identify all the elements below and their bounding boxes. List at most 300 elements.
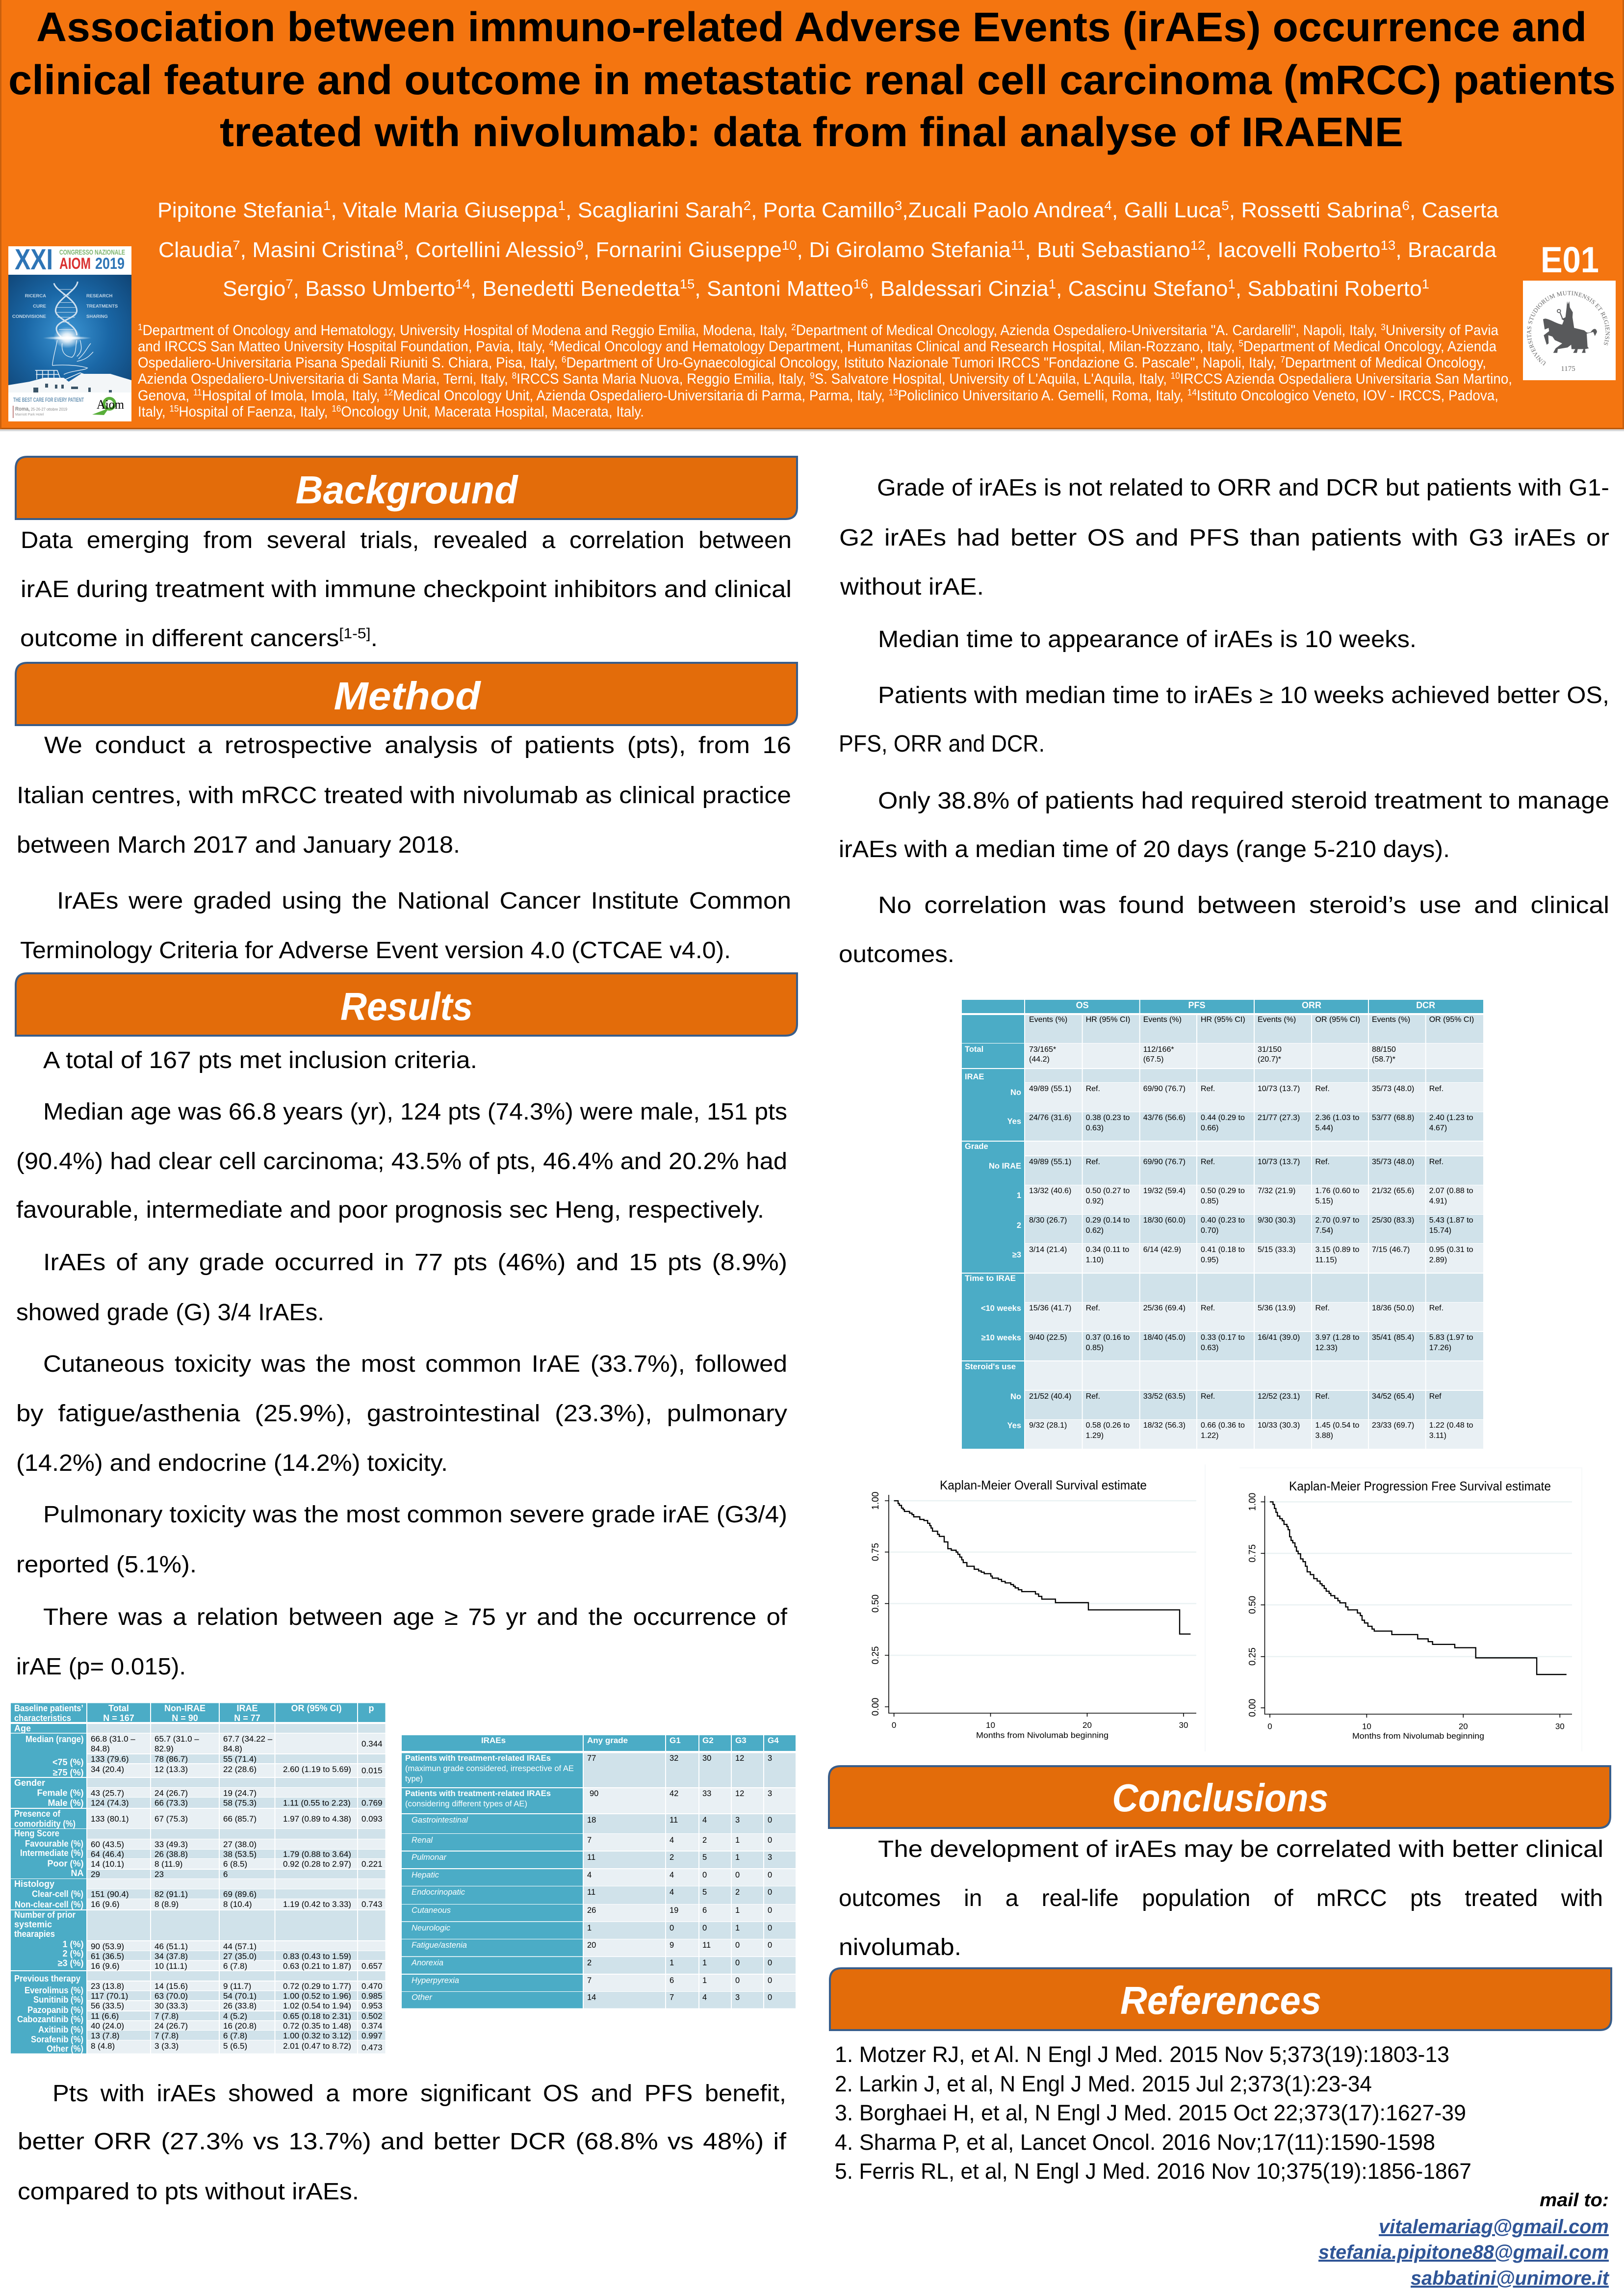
table body values: 0.344 [361, 1739, 383, 1748]
table values: 0.95) [1201, 1256, 1218, 1264]
table values: 15/36 (41.7) [1029, 1304, 1071, 1312]
table values: 7 [670, 1993, 674, 2002]
table body values: 24 (26.7) [155, 1789, 188, 1798]
table values: 1.45 (0.54 to [1315, 1421, 1359, 1430]
table body values: 0.985 [361, 1991, 383, 2001]
text: results continued, right column [839, 475, 1609, 967]
row labels: Presence of [14, 1809, 61, 1819]
row labels: ≥10 weeks [981, 1333, 1021, 1342]
table body values: 0.83 (0.43 to 1.59) [283, 1952, 351, 1961]
table values: 1.10) [1086, 1256, 1104, 1264]
row labels: Anorexia [411, 1958, 443, 1967]
table values: 69/90 (76.7) [1143, 1158, 1186, 1166]
table values: 3 [768, 1754, 772, 1763]
table values: 11.15) [1315, 1256, 1337, 1264]
row labels: IRAE [965, 1072, 984, 1081]
row labels: Cutaneous [412, 1905, 451, 1915]
logo: AIOM 2019 congress poster: TREATMENTS [86, 304, 118, 309]
row labels: Yes [1007, 1117, 1021, 1126]
table values: Ref. [1086, 1392, 1100, 1401]
table values: 35/41 (85.4) [1372, 1333, 1414, 1342]
table values: 12 [735, 1754, 744, 1763]
row labels: 1 (%) [62, 1939, 83, 1949]
table values: 10/33 (30.3) [1258, 1421, 1300, 1430]
table body values: 66 (85.7) [223, 1814, 257, 1824]
table values: 4 [670, 1871, 674, 1879]
row labels: Male (%) [48, 1798, 84, 1808]
table values: Events (%) [1029, 1016, 1067, 1024]
logo: University of Modena and Reggio Emilia seal: 1175 [1561, 365, 1575, 373]
row labels: No [1010, 1088, 1021, 1097]
table body values: 1.97 (0.89 to 4.38) [283, 1814, 351, 1824]
table body values: 1.79 (0.88 to 3.64) [283, 1850, 351, 1859]
logo: AIOM 2019 congress poster: AIOM [59, 255, 91, 272]
table values: OR (95% CI) [1429, 1016, 1474, 1024]
table body values: 0.997 [361, 2031, 383, 2040]
row labels: <10 weeks [981, 1304, 1021, 1313]
table body values: 8 (4.8) [91, 2041, 115, 2051]
table values: 18/40 (45.0) [1143, 1333, 1186, 1342]
chart: Kaplan-Meier progression free survival: 0.25 [1248, 1647, 1258, 1666]
table body values: 54 (70.1) [223, 1991, 257, 2001]
row labels [14, 1723, 84, 2054]
header row: G2 [702, 1736, 714, 1745]
text: method paragraphs: between March 2017 and January 2018. [17, 832, 460, 858]
authors: Claudia7, Masini Cristina8, Cortellini Alessio9, Fornarini Giuseppe10, Di Girolamo Stefania11, Buti Sebastiano12, Iacovelli Roberto13, Bracarda [158, 237, 1497, 262]
heading: Conclusions: Conclusions [1112, 1776, 1328, 1820]
text: results continued, right column: without irAE. [840, 574, 984, 600]
header row: Any grade [587, 1736, 628, 1745]
text: results paragraphs [16, 1047, 788, 1680]
table values: 1 [735, 1853, 740, 1862]
row labels: ≥75 (%) [53, 1768, 83, 1777]
row labels: Renal [412, 1835, 433, 1845]
table body values: 84.8) [91, 1744, 110, 1753]
panel: method [16, 663, 797, 964]
table values: 3.97 (1.28 to [1315, 1333, 1359, 1342]
table values: 1 [735, 1924, 740, 1932]
row labels: Patients with treatment-related IRAEs [405, 1789, 551, 1798]
table body values: 0.769 [361, 1799, 383, 1807]
table values: 9/40 (22.5) [1029, 1333, 1067, 1342]
table body values: 7 (7.8) [155, 2031, 179, 2040]
table body values: 0.470 [361, 1982, 383, 1991]
table body values: 69 (89.6) [223, 1890, 257, 1899]
table values: 0.92) [1086, 1197, 1104, 1205]
column group headers: OS [1076, 1000, 1089, 1010]
row labels: 2 (%) [62, 1949, 83, 1958]
text: results continued, right column: Only 38.8% of patients had required steroid treatment to manage [878, 788, 1609, 814]
table values: 5.43 (1.87 to [1429, 1216, 1473, 1225]
table values: 3 [735, 1816, 740, 1825]
table values: Ref. [1086, 1304, 1100, 1312]
table values: 1 [735, 1836, 740, 1845]
logo: AIOM 2019 congress poster: Aiom [97, 397, 124, 412]
table values: Events (%) [1372, 1016, 1410, 1024]
table values: (58.7)* [1372, 1055, 1395, 1064]
affiliations: Genova, 11Hospital of Imola, Imola, Italy, 12Medical Oncology Unit, Azienda Ospedaliero-Universitaria di Parma, Parma, Italy, 13Policlinico Universitario A. Gemelli, Roma, Italy, 14Istituto Oncologico Veneto, IOV - IRCCS, Padova, [138, 387, 1498, 404]
table values: 33/52 (63.5) [1143, 1392, 1186, 1401]
table body values: 61 (36.5) [91, 1952, 124, 1961]
table values: 0.50 (0.29 to [1201, 1187, 1245, 1195]
table values: 42 [670, 1789, 678, 1798]
text: results continued, right column: irAEs with a median time of 20 days (range 5-210 days). [839, 836, 1450, 862]
row labels: Other [412, 1993, 433, 2002]
table values: 0 [768, 1871, 772, 1879]
table values: 16/41 (39.0) [1258, 1333, 1300, 1342]
table values: 24/76 (31.6) [1029, 1114, 1071, 1122]
table header row: OR (95% CI) [291, 1703, 342, 1713]
table body values: 90 (53.9) [91, 1942, 124, 1951]
table values: 2.89) [1429, 1256, 1447, 1264]
table values: 2.36 (1.03 to [1315, 1114, 1359, 1122]
table body values [91, 1734, 383, 2052]
table body values: 0.72 (0.29 to 1.77) [283, 1982, 351, 1991]
list: references: 4. Sharma P, et al, Lancet Oncol. 2016 Nov;17(11):1590-1598 [835, 2130, 1435, 2155]
table values: OR (95% CI) [1315, 1016, 1360, 1024]
affiliations: Italy, 15Hospital of Faenza, Italy, 16Oncology Unit, Macerata Hospital, Macerata, Italy. [138, 403, 644, 420]
row labels: comorbidity (%) [14, 1819, 76, 1829]
table values: 0 [768, 1993, 772, 2002]
table body values: 5 (6.5) [223, 2041, 247, 2051]
text: conclusions paragraph: outcomes in a real-life population of mRCC pts treated with [839, 1885, 1603, 1911]
table body values: 6 (7.8) [223, 1961, 247, 1971]
table values: 1.22 (0.48 to [1429, 1421, 1473, 1430]
table values: 5.83 (1.97 to [1429, 1333, 1473, 1342]
text: results paragraphs: reported (5.1%). [16, 1552, 197, 1578]
table body values: 1.00 (0.52 to 1.96) [283, 1991, 351, 2001]
table values: 0.85) [1201, 1197, 1218, 1205]
table values: 49/89 (55.1) [1029, 1085, 1071, 1093]
table values: 13/32 (40.6) [1029, 1187, 1071, 1195]
table values: 3 [768, 1853, 772, 1862]
chart: Kaplan-Meier overall survival: 0.75 [871, 1543, 881, 1561]
row labels: Patients with treatment-related IRAEs [405, 1753, 551, 1763]
table values: 1 [702, 1958, 707, 1967]
table header row [14, 1703, 374, 1723]
table values: 0 [768, 1941, 772, 1950]
table values: 49/89 (55.1) [1029, 1158, 1071, 1166]
table body values: 6 [223, 1870, 228, 1879]
logo: AIOM 2019 congress poster: SHARING [86, 314, 108, 319]
table values: 23/33 (69.7) [1372, 1421, 1414, 1430]
table body values: 6 (8.5) [223, 1859, 247, 1869]
table values: 0.85) [1086, 1344, 1104, 1352]
table values: 4.91) [1429, 1197, 1447, 1205]
table body values: 40 (24.0) [91, 2021, 124, 2031]
table body values: 22 (28.6) [223, 1765, 257, 1774]
row labels: Pulmonar [412, 1852, 447, 1862]
table body values: 3 (3.3) [155, 2041, 179, 2051]
survival curve [1270, 1502, 1567, 1674]
row labels: No [1010, 1392, 1021, 1401]
row labels: (maximun grade considered, irrespective of AE [405, 1764, 574, 1773]
table body values: 66.8 (31.0 – [91, 1734, 135, 1744]
table values: 2 [735, 1888, 740, 1897]
table values: 33 [702, 1789, 711, 1798]
table: baseline patients' characteristics [11, 1703, 386, 2054]
header row: G3 [735, 1736, 747, 1745]
table values: 9 [670, 1941, 674, 1950]
column group headers [1076, 1000, 1435, 1010]
table values: 5.15) [1315, 1197, 1333, 1205]
row labels: 1 [1017, 1191, 1021, 1200]
table values: 0.29 (0.14 to [1086, 1216, 1130, 1225]
table values: Ref. [1201, 1304, 1215, 1312]
table body values: 151 (90.4) [91, 1890, 129, 1899]
table values: 0.41 (0.18 to [1201, 1246, 1245, 1254]
table values: HR (95% CI) [1201, 1016, 1245, 1024]
table values: 0.50 (0.27 to [1086, 1187, 1130, 1195]
list: references [835, 2042, 1471, 2184]
row labels: Hepatic [412, 1870, 439, 1879]
table values: 73/165* [1029, 1045, 1056, 1054]
heading: Background [16, 457, 797, 519]
text: results paragraphs: showed grade (G) 3/4 IrAEs. [16, 1300, 324, 1326]
table values: 35/73 (48.0) [1372, 1085, 1414, 1093]
table values: 0 [735, 1976, 740, 1985]
table values: HR (95% CI) [1086, 1016, 1130, 1024]
table values: 2 [587, 1958, 592, 1967]
chart: Kaplan-Meier overall survival: 0.50 [871, 1594, 881, 1613]
header row: G1 [670, 1736, 681, 1745]
table body values: 6 (7.8) [223, 2031, 247, 2040]
row labels: ≥3 [1012, 1251, 1021, 1259]
text: results paragraphs: Median age was 66.8 years (yr), 124 pts (74.3%) were male, 151 pts [43, 1099, 787, 1125]
table values: Ref. [1429, 1304, 1444, 1312]
table values: 25/36 (69.4) [1143, 1304, 1186, 1312]
table body values: 0.502 [361, 2011, 383, 2021]
table body values: 0.374 [361, 2021, 383, 2031]
table values: 6 [670, 1976, 674, 1985]
table values: 1 [587, 1924, 592, 1932]
table body values: 23 (13.8) [91, 1982, 124, 1991]
text: results continued, right column: No correlation was found between steroid’s use and clinical [878, 892, 1609, 918]
list: references: 3. Borghaei H, et al, N Engl J Med. 2015 Oct 22;373(17):1627-39 [835, 2100, 1466, 2125]
table body values: 9 (11.7) [223, 1982, 251, 1991]
chart: Kaplan-Meier progression free survival [1239, 1468, 1582, 1751]
table values: 2 [670, 1853, 674, 1862]
affiliations: Ospedaliero-Universitaria Pisana Spedali Riuniti S. Chiara, Pisa, Italy, 6Department of Uro-Gynaecological Oncology, Istituto Nazionale Tumori IRCCS "Fondazione G. Pascale", Napoli, Italy, 7Department of Medical Oncology, [138, 354, 1486, 371]
list: references: 5. Ferris RL, et al, N Engl J Med. 2016 Nov 10;375(19):1856-1867 [835, 2159, 1471, 2184]
row labels: Pazopanib (%) [27, 2005, 83, 2015]
table values: Ref. [1315, 1158, 1330, 1166]
logo: AIOM 2019 congress poster: CURE [33, 304, 46, 309]
table values: 2.07 (0.88 to [1429, 1187, 1473, 1195]
chart: Kaplan-Meier progression free survival: Months from Nivolumab beginning [1352, 1731, 1484, 1741]
table values: 21/77 (27.3) [1258, 1114, 1300, 1122]
table values: 5/36 (13.9) [1258, 1304, 1295, 1312]
table body values: 24 (26.7) [155, 2021, 188, 2031]
table values: Events (%) [1143, 1016, 1182, 1024]
table values: 0 [768, 1816, 772, 1825]
table values: 9/30 (30.3) [1258, 1216, 1295, 1225]
table values: 69/90 (76.7) [1143, 1085, 1186, 1093]
row labels: Everolimus (%) [25, 1985, 83, 1995]
table values: 5 [702, 1888, 707, 1897]
heading: References [830, 1968, 1611, 2030]
text: results paragraphs: IrAEs of any grade occurred in 77 pts (46%) and 15 pts (8.9%) [43, 1250, 787, 1276]
table values: 14 [587, 1993, 596, 2002]
table values: 88/150 [1372, 1045, 1396, 1054]
table body values: 0.221 [361, 1859, 383, 1869]
text: results paragraphs: irAE (p= 0.015). [16, 1654, 186, 1680]
text: results paragraphs: There was a relation between age ≥ 75 yr and the occurrence of [43, 1604, 788, 1630]
affiliations: and IRCCS San Matteo University Hospital Foundation, Pavia, Italy, 4Medical Oncology and Hematology Department, Humanitas Clinical and Research Hospital, Milan-Rozzano, Italy, 5Department of Medical Oncology, Azienda [138, 338, 1496, 355]
table body values: 0.657 [361, 1961, 383, 1971]
table values: Ref. [1201, 1392, 1215, 1401]
table body values: 55 (71.4) [223, 1754, 257, 1764]
text: method paragraphs: We conduct a retrospective analysis of patients (pts), from 16 [44, 732, 791, 758]
table values: 0 [768, 1888, 772, 1897]
table values: Ref. [1086, 1085, 1100, 1093]
table body values: 27 (35.0) [223, 1952, 257, 1961]
table body values: 16 (9.6) [91, 1900, 120, 1909]
panel: conclusions [829, 1766, 1610, 1960]
row labels: thearapies [14, 1929, 55, 1939]
row labels: Yes [1007, 1421, 1021, 1430]
table values: 1.22) [1201, 1432, 1218, 1440]
table body values: 0.953 [361, 2001, 383, 2010]
table values: 18/36 (50.0) [1372, 1304, 1414, 1312]
table values: 4 [587, 1871, 592, 1879]
table values: Ref. [1429, 1158, 1444, 1166]
row labels: (considering different types of AE) [405, 1799, 527, 1808]
table values: 0 [735, 1941, 740, 1950]
logo: AIOM 2019 congress poster: Marriott Park Hotel [15, 413, 44, 417]
table values: 1.76 (0.60 to [1315, 1187, 1359, 1195]
text: results continued, right column: Grade of irAEs is not related to ORR and DCR but patients with G1- [877, 475, 1609, 501]
row labels: <75 (%) [52, 1757, 84, 1767]
row labels: Total [965, 1045, 983, 1054]
table values: Ref. [1315, 1304, 1330, 1312]
table values: 4 [670, 1888, 674, 1897]
affiliations: 1Department of Oncology and Hematology, University Hospital of Modena and Reggio Emilia, Modena, Italy, 2Department of Medical Oncology, Azienda Ospedaliero-Universitaria "A. Cardarelli", Napoli, Italy, 3University of Pavia [138, 322, 1498, 339]
chart: Kaplan-Meier progression free survival: 30 [1555, 1722, 1565, 1731]
text: results closing paragraph: better ORR (27.3% vs 13.7%) and better DCR (68.8% vs 48%) if [18, 2129, 787, 2155]
table body values: 46 (51.1) [155, 1942, 188, 1951]
table values: 11 [670, 1816, 678, 1825]
text: results continued, right column: Median time to appearance of irAEs is 10 weeks. [878, 626, 1417, 652]
chart: Kaplan-Meier progression free survival: Kaplan-Meier Progression Free Survival estimate [1289, 1479, 1551, 1493]
table values: 19 [670, 1906, 678, 1915]
heading: Conclusions [829, 1766, 1610, 1828]
table values: 20 [587, 1941, 596, 1950]
table values: 9/32 (28.1) [1029, 1421, 1067, 1430]
row labels: Cabozantinib (%) [17, 2014, 83, 2024]
table body values: 0.473 [361, 2043, 383, 2052]
table body values: 2.01 (0.47 to 8.72) [283, 2041, 351, 2051]
table values: Ref. [1429, 1085, 1444, 1093]
row labels: Sunitinib (%) [33, 1995, 83, 2005]
table values: 11 [587, 1888, 595, 1897]
table values: 32 [670, 1754, 678, 1763]
text: background paragraph: irAE during treatment with immune checkpoint inhibitors and clinical [21, 576, 792, 602]
logo: AIOM 2019 congress poster [8, 243, 131, 421]
logo: AIOM 2019 congress poster: THE BEST CARE FOR EVERY PATIENT [13, 397, 84, 403]
row labels: systemic [14, 1920, 52, 1930]
table values: 0 [768, 1976, 772, 1985]
text: results paragraphs: Cutaneous toxicity was the most common IrAE (33.7%), followed [43, 1351, 787, 1377]
text: results paragraphs: (90.4%) had clear cell carcinoma; 43.5% of pts, 46.4% and 20.2% had [16, 1148, 787, 1174]
row labels: Previous therapy [14, 1974, 80, 1983]
table values: Ref [1429, 1392, 1442, 1401]
chart: Kaplan-Meier overall survival: 10 [986, 1721, 995, 1730]
logo: AIOM 2019 congress poster: CONGRESSO NAZIONALE [59, 248, 125, 257]
text: background paragraph: Data emerging from several trials, revealed a correlation between [21, 527, 792, 553]
table values: (67.5) [1143, 1055, 1163, 1064]
table values: 10/73 (13.7) [1258, 1158, 1300, 1166]
table values: 7/32 (21.9) [1258, 1187, 1295, 1195]
table values: 6/14 (42.9) [1143, 1246, 1181, 1254]
table header row: Baseline patients’ [14, 1703, 83, 1713]
row labels: Sorafenib (%) [31, 2035, 83, 2044]
row labels: Fatigue/astenia [412, 1940, 467, 1950]
logo: AIOM 2019 congress poster: 2019 [95, 255, 125, 272]
table values [1029, 1016, 1474, 1440]
table values: 11 [702, 1941, 711, 1950]
table body values: 2.60 (1.19 to 5.69) [283, 1765, 351, 1774]
table body values: 0.015 [361, 1766, 383, 1775]
table body values: 60 (43.5) [91, 1840, 124, 1849]
table header row: IRAE [236, 1703, 258, 1713]
text: conclusions paragraph: The development of irAEs may be correlated with better clinical [878, 1836, 1603, 1862]
table values: 18 [587, 1816, 596, 1825]
table body values: 11 (6.6) [91, 2011, 119, 2021]
table body values: 30 (33.3) [155, 2001, 188, 2010]
text: results closing paragraph [18, 2081, 787, 2205]
row labels: Median (range) [26, 1734, 84, 1744]
table values: 0.95 (0.31 to [1429, 1246, 1473, 1254]
row labels: Non-clear-cell (%) [15, 1900, 83, 1909]
affiliations [138, 322, 1512, 420]
heading: References: References [1120, 1979, 1321, 2022]
table body values: 0.093 [361, 1814, 383, 1824]
table values: 25/30 (83.3) [1372, 1216, 1414, 1225]
table body values: 8 (10.4) [223, 1900, 252, 1909]
list: references: 2. Larkin J, et al, N Engl J Med. 2015 Jul 2;373(1):23-34 [835, 2071, 1372, 2096]
table values: 18/30 (60.0) [1143, 1216, 1186, 1225]
text: results paragraphs: A total of 167 pts met inclusion criteria. [43, 1047, 477, 1073]
table body values: 56 (33.5) [91, 2001, 124, 2010]
authors: Sergio7, Basso Umberto14, Benedetti Benedetta15, Santoni Matteo16, Baldessari Cinzia1, Cascinu Stefano1, Sabbatini Roberto1 [223, 276, 1429, 301]
table body values: 26 (38.8) [155, 1850, 188, 1859]
table header row: Total [108, 1703, 129, 1713]
table body values: 8 (8.9) [155, 1900, 179, 1909]
table body values: 133 (80.1) [91, 1814, 129, 1824]
table body values: 84.8) [223, 1744, 242, 1753]
table values: 2.70 (0.97 to [1315, 1216, 1359, 1225]
table body values: 0.92 (0.28 to 2.97) [283, 1859, 351, 1869]
text: method paragraphs: Terminology Criteria for Adverse Event version 4.0 (CTCAE v4.0). [20, 938, 731, 964]
table values: 5 [702, 1853, 707, 1862]
table values [587, 1754, 772, 2002]
header row [481, 1736, 779, 1745]
chart: Kaplan-Meier overall survival: 1.00 [871, 1492, 881, 1510]
table values: 77 [587, 1754, 596, 1763]
chart: Kaplan-Meier overall survival: 0.00 [871, 1698, 881, 1716]
table values: 35/73 (48.0) [1372, 1158, 1414, 1166]
chart: Kaplan-Meier overall survival: Months from Nivolumab beginning [976, 1731, 1108, 1740]
table values: Ref. [1201, 1158, 1215, 1166]
chart: Kaplan-Meier progression free survival: 0.75 [1248, 1544, 1258, 1563]
table header row: N = 90 [172, 1713, 198, 1723]
column group headers: DCR [1416, 1000, 1435, 1010]
text: conclusions paragraph [839, 1836, 1603, 1960]
row labels: Poor (%) [47, 1858, 84, 1868]
table values: 7/15 (46.7) [1372, 1246, 1410, 1254]
chart: Kaplan-Meier overall survival: Kaplan-Meier Overall Survival estimate [940, 1478, 1147, 1492]
